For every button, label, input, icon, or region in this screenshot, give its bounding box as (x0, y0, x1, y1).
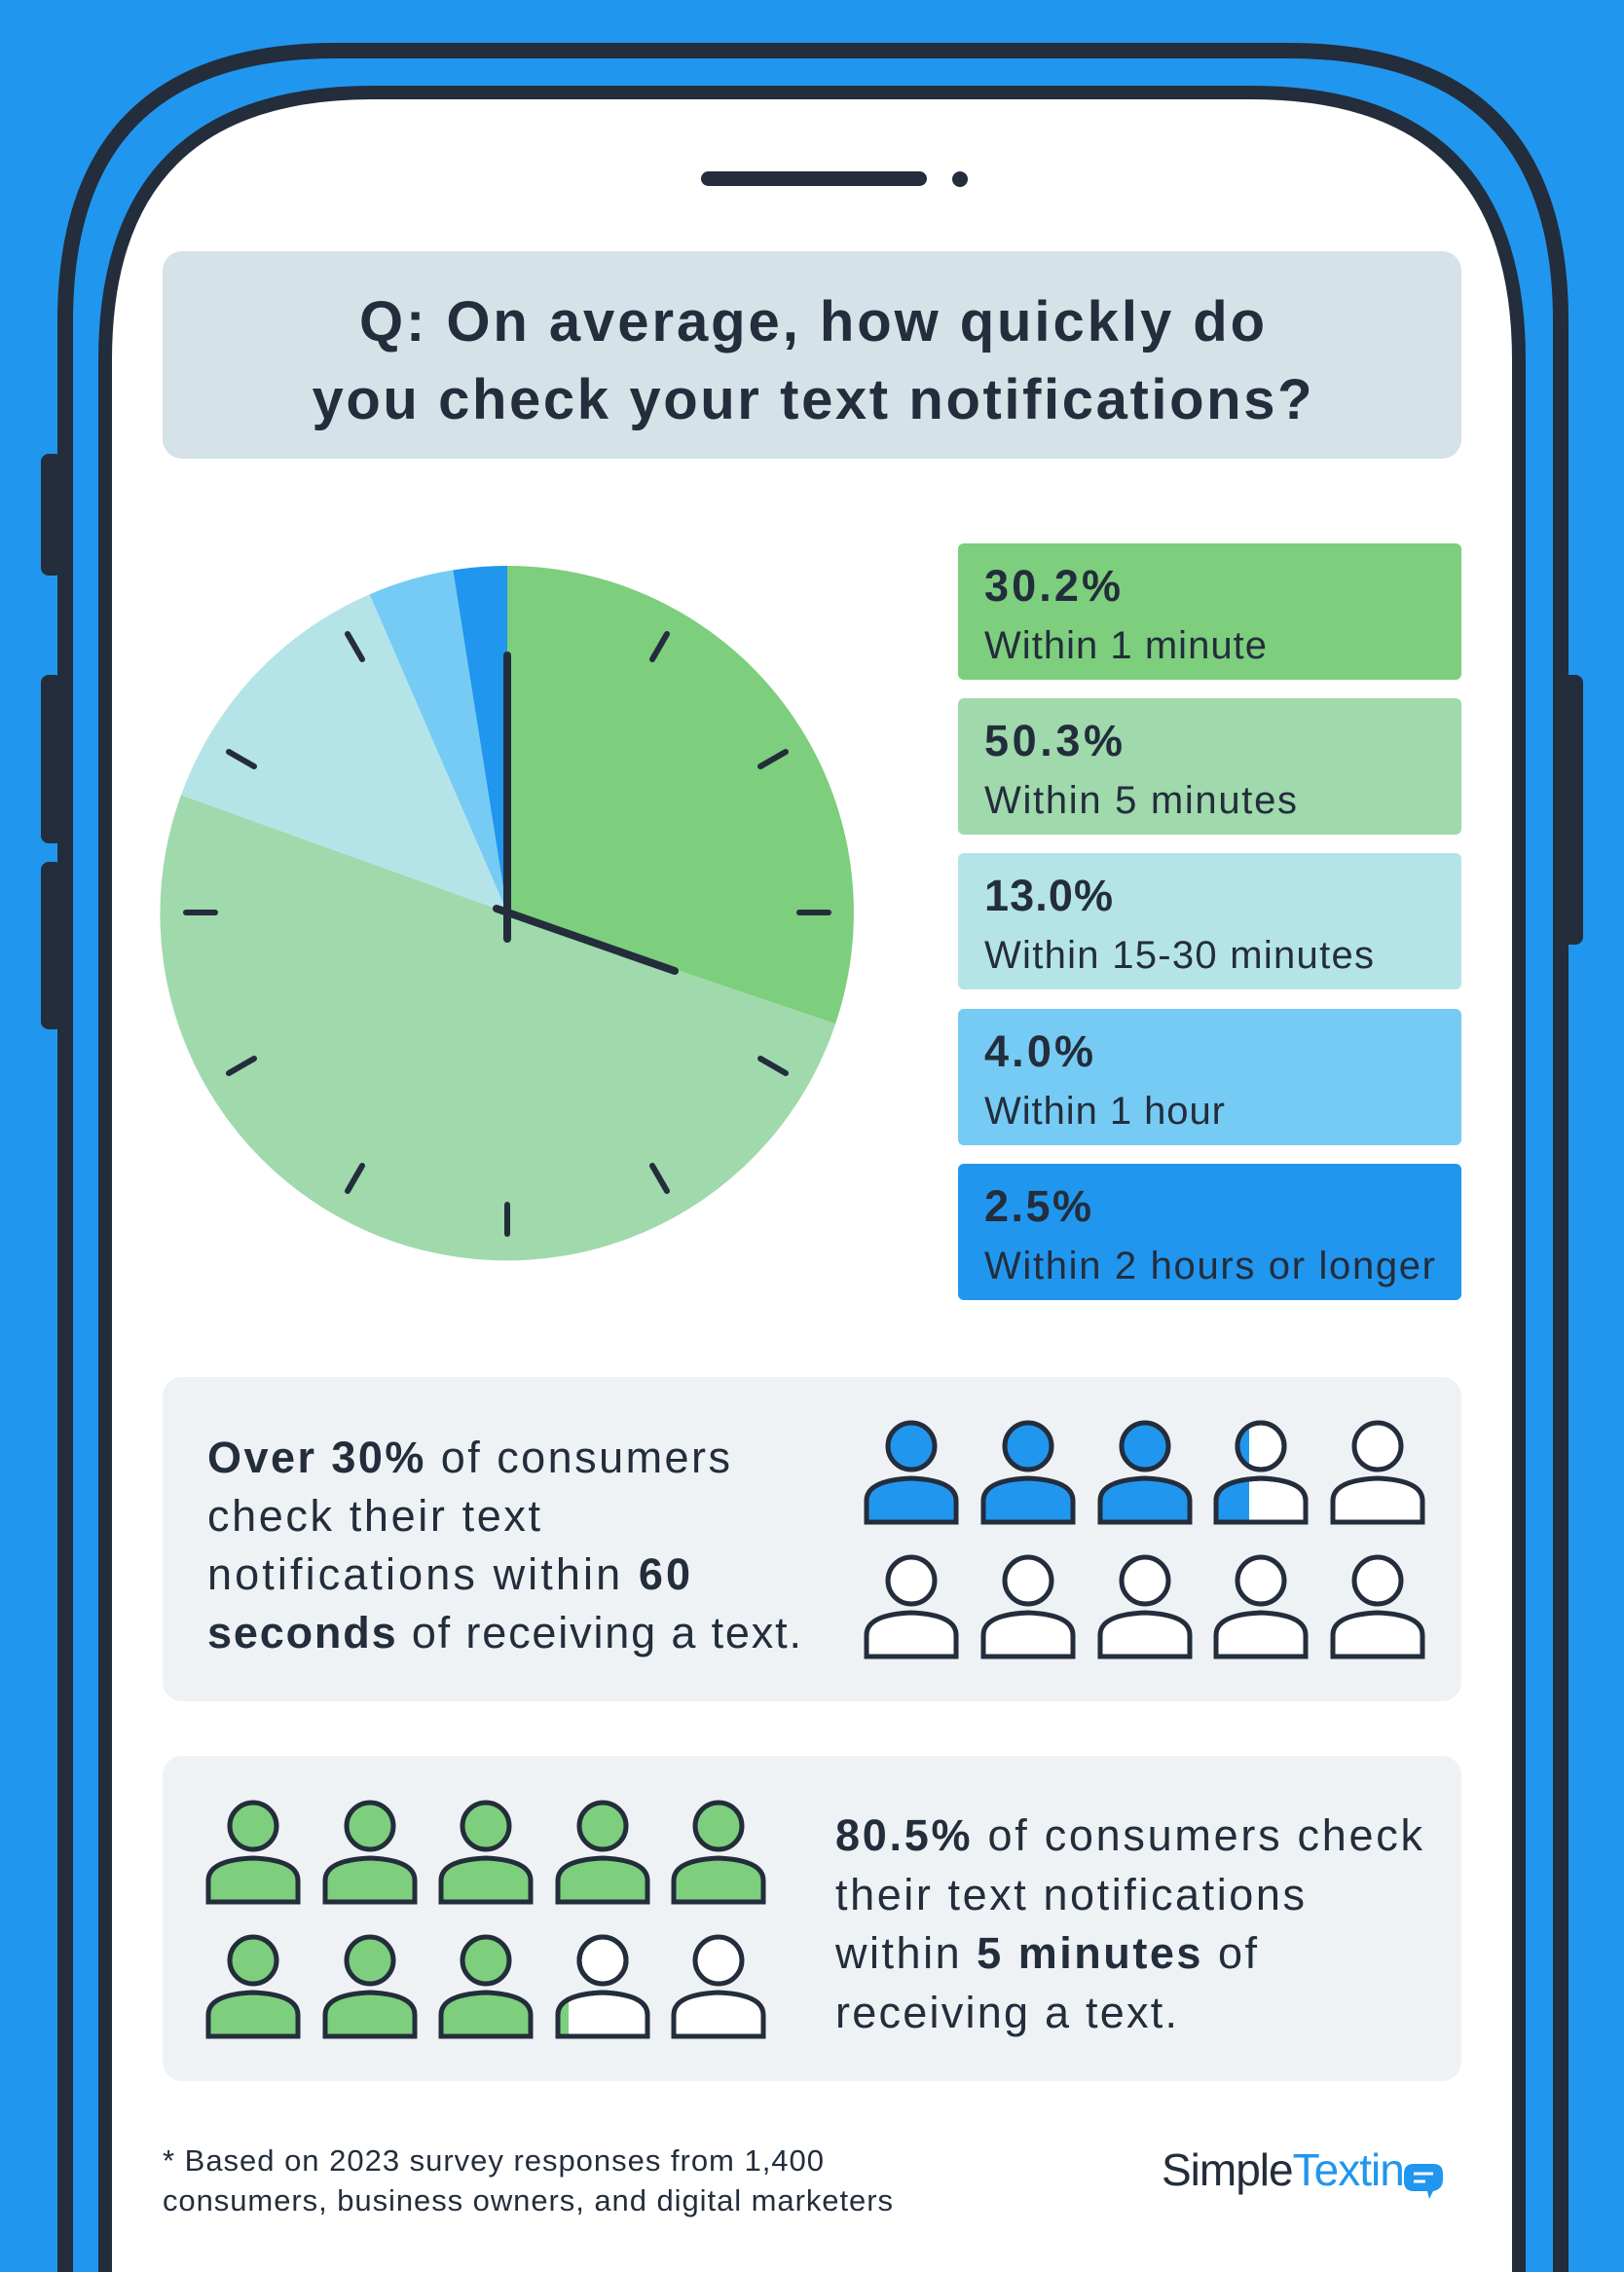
title: you check your text notifications? (312, 368, 1312, 431)
logo: SimpleTextin (1162, 2144, 1404, 2195)
panel: 80.5% stat (163, 1756, 1461, 2081)
stat text 1 (207, 1433, 801, 1657)
people icons green (208, 1803, 763, 2036)
pie chart clock (160, 566, 854, 1260)
speaker (701, 171, 968, 187)
legend (958, 543, 1461, 1300)
legend item 1 (958, 543, 1461, 680)
legend item 3: 13.0% (984, 871, 1113, 920)
legend item 1: Within 1 minute (984, 624, 1267, 667)
footnote (163, 2143, 893, 2217)
legend item 5: 2.5% (984, 1181, 1091, 1231)
stat text 1: seconds of receiving a text. (207, 1608, 801, 1657)
footnote: consumers, business owners, and digital marketers (163, 2183, 893, 2217)
title: Q: On average, how quickly do (359, 290, 1265, 354)
stat text 1: Over 30% of consumers (207, 1433, 730, 1482)
title (163, 251, 1461, 459)
legend item 5: Within 2 hours or longer (984, 1245, 1435, 1287)
stat text 2: within 5 minutes of (834, 1928, 1257, 1978)
legend item 5 (958, 1164, 1461, 1300)
stat text 2: 80.5% of consumers check (835, 1810, 1423, 1860)
legend item 2: Within 5 minutes (984, 779, 1297, 822)
legend item 4 (958, 1009, 1461, 1145)
stat text 2: their text notifications (835, 1870, 1305, 1919)
legend item 4: Within 1 hour (984, 1090, 1225, 1133)
panel: 30% stat (163, 1377, 1461, 1701)
footnote: * Based on 2023 survey responses from 1,400 (163, 2143, 824, 2178)
people icons blue (867, 1423, 1422, 1657)
legend item 2 (958, 698, 1461, 835)
stat text 2: receiving a text. (835, 1988, 1177, 2037)
legend item 3: Within 15-30 minutes (984, 934, 1374, 977)
legend item 1: 30.2% (984, 561, 1121, 611)
stat text 2 (834, 1810, 1423, 2037)
stat text 1: notifications within 60 (207, 1549, 690, 1599)
stat text 1: check their text (207, 1491, 540, 1541)
legend item 2: 50.3% (984, 716, 1123, 765)
phone side buttons (41, 454, 1583, 1029)
legend item 4: 4.0% (984, 1026, 1093, 1076)
legend item 3 (958, 853, 1461, 989)
